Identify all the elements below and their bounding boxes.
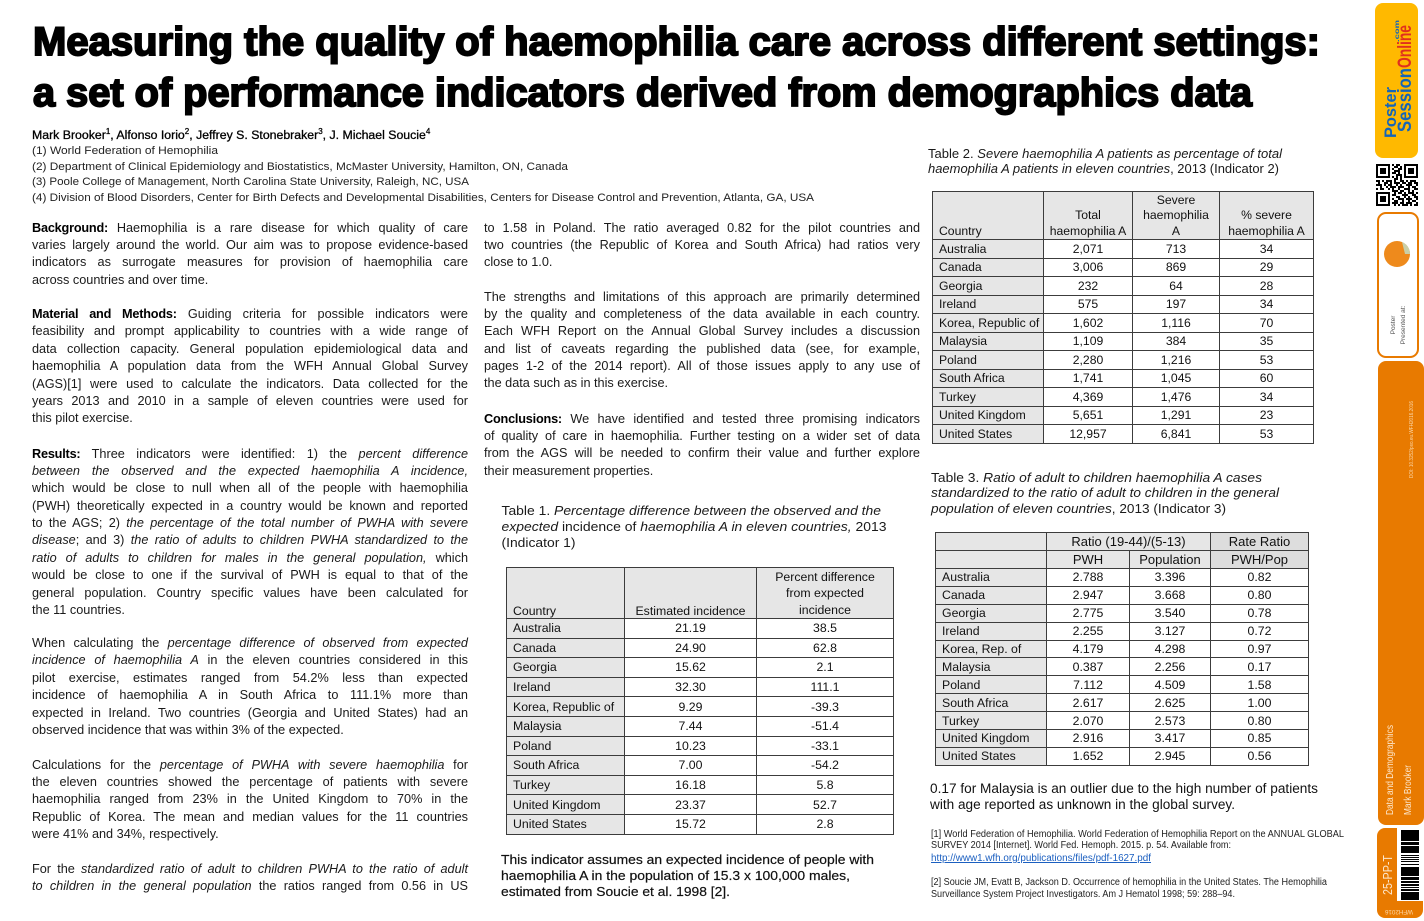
affiliations bbox=[32, 145, 814, 204]
text block: ratio continued: to 1.58 in Poland. The ratio averaged 0.82 for the pilot countries and bbox=[484, 220, 920, 234]
table 3: 0.97 bbox=[1248, 642, 1271, 656]
table 3: 2.070 bbox=[1073, 714, 1103, 728]
table 3: 3.668 bbox=[1155, 588, 1185, 602]
table 3: Turkey bbox=[942, 714, 979, 728]
table 2: Ireland bbox=[939, 297, 976, 311]
references bbox=[931, 829, 1344, 900]
text block: results bbox=[32, 446, 468, 617]
table 1: 38.5 bbox=[813, 621, 837, 635]
affiliations: (2) Department of Clinical Epidemiology and Biostatistics, McMaster University, Hamilton, ON, Canada bbox=[32, 161, 569, 173]
text block: results: (PWH) theoretically expected in a country would be known and reported bbox=[32, 499, 468, 513]
table 2: % severe bbox=[1241, 208, 1292, 222]
table 1: 21.19 bbox=[675, 621, 706, 635]
text block: ratio continued: two countries (the Republic of Korea and South Africa) had ratios very bbox=[484, 238, 920, 252]
text block: strengths and limitations: Each WFH Report on the Annual Global Survey includes a discussion bbox=[484, 324, 920, 338]
text block: results: to the AGS; 2) the percentage of the total number of PWHA with severe bbox=[32, 516, 468, 530]
table 3: Poland bbox=[942, 678, 980, 692]
panel: orange topic bar: Mark Brooker bbox=[1403, 764, 1414, 815]
table 1: Percent difference bbox=[775, 570, 875, 584]
table 3: 0.56 bbox=[1248, 749, 1271, 763]
text block: percentage severe: Calculations for the percentage of PWHA with severe haemophilia for bbox=[32, 758, 468, 772]
text block: material and methods: Material and Methods: Guiding criteria for possible indicators were bbox=[32, 307, 468, 321]
table 3: 0.80 bbox=[1248, 714, 1271, 728]
table 1: 16.18 bbox=[675, 778, 706, 792]
table 1: United Kingdom bbox=[513, 798, 600, 812]
table 1 caption: Table 1. Percentage difference between the observed and the bbox=[502, 503, 881, 518]
table 2: 6,841 bbox=[1161, 427, 1191, 441]
table 3 caption: Table 3. Ratio of adult to children haemophilia A cases bbox=[931, 470, 1262, 485]
table 2 bbox=[932, 191, 1314, 444]
table 2: 53 bbox=[1260, 427, 1273, 441]
text block: strengths and limitations: the data such as in this exercise. bbox=[484, 376, 668, 390]
table 3: Ratio (19-44)/(5-13) bbox=[1071, 534, 1186, 548]
table 3: 2.573 bbox=[1155, 714, 1185, 728]
table 3: PWH/Pop bbox=[1231, 552, 1288, 566]
table 1: from expected bbox=[786, 586, 864, 600]
panel: orange topic bar: DOI: 10.3252/pso.eu.WFH2016.2016 bbox=[1409, 401, 1415, 478]
table 3: 0.17 bbox=[1248, 660, 1271, 674]
table 2: 1,291 bbox=[1161, 408, 1191, 422]
table 3 caption: standardized to the ratio of adult to children in the general bbox=[931, 485, 1280, 500]
table 2: 70 bbox=[1260, 316, 1273, 330]
table 2: United Kingdom bbox=[939, 408, 1026, 422]
table 3: 2.775 bbox=[1073, 606, 1103, 620]
table 3: South Africa bbox=[942, 696, 1008, 710]
table 3: Population bbox=[1139, 552, 1201, 566]
text block: conclusions: of quality of care in haemophilia. Further testing on a wider set of data bbox=[484, 429, 920, 443]
text block: percentage difference: expected in Ireland. Two countries (Georgia and United States) had an bbox=[32, 706, 468, 720]
table 2: haemophilia A bbox=[1050, 224, 1126, 238]
table 1: United States bbox=[513, 817, 587, 831]
logo: PosterSessionOnline bbox=[1375, 3, 1418, 158]
table 3: Canada bbox=[942, 588, 985, 602]
references: http://www1.wfh.org/publications/files/pdf-1627.pdf bbox=[931, 853, 1151, 864]
text block: material and methods: data collection capacity. General population epidemiological data and bbox=[32, 342, 468, 356]
table 2: haemophilia A bbox=[1228, 224, 1305, 238]
table 1: -33.1 bbox=[811, 739, 839, 753]
table 2: 28 bbox=[1260, 279, 1273, 293]
table 2: 34 bbox=[1260, 390, 1273, 404]
table 3: 2.255 bbox=[1073, 624, 1103, 638]
references: [2] Soucie JM, Evatt B, Jackson D. Occurrence of hemophilia in the United States. The Hemophilia bbox=[931, 877, 1327, 888]
table 3: 4.298 bbox=[1155, 642, 1185, 656]
table 2: Total bbox=[1075, 208, 1101, 222]
table 3: Rate Ratio bbox=[1229, 534, 1290, 548]
table 2: Korea, Republic of bbox=[939, 316, 1039, 330]
table 1 caption bbox=[502, 503, 886, 550]
text block: percentage severe: Republic of Korea. The mean and median values for the 11 countries bbox=[32, 810, 468, 824]
text block: results: between the observed and the expected haemophilia A incidence, bbox=[32, 464, 468, 478]
table 2: 60 bbox=[1260, 371, 1273, 385]
text block: standardized ratio: For the standardized ratio of adult to children PWHA to the ratio of adult bbox=[32, 862, 468, 876]
panel: presented at bbox=[1378, 213, 1418, 357]
table 2: 3,006 bbox=[1073, 260, 1103, 274]
table 3: 0.72 bbox=[1248, 624, 1271, 638]
table 3: 1.00 bbox=[1248, 696, 1271, 710]
table 2: 232 bbox=[1078, 279, 1098, 293]
text block: conclusions: from the AGS will be needed to confirm their value and further explore bbox=[484, 446, 920, 460]
table 2: 384 bbox=[1166, 334, 1186, 348]
table 2: 5,651 bbox=[1073, 408, 1103, 422]
text block: percentage severe: the eleven countries showed the percentage of patients with severe bbox=[32, 775, 468, 789]
table 1 footnote: This indicator assumes an expected incidence of people with bbox=[501, 852, 874, 867]
text block: results: Results: Three indicators were identified: 1) the percent difference bbox=[32, 446, 468, 460]
table 2 caption: Table 2. Severe haemophilia A patients as percentage of total bbox=[928, 146, 1283, 161]
table 2: 35 bbox=[1260, 334, 1273, 348]
table 1: Estimated incidence bbox=[635, 604, 746, 618]
table 1 footnote: haemophilia A in the population of 15.3 x 100,000 males, bbox=[501, 868, 850, 883]
table 2: Turkey bbox=[939, 390, 976, 404]
table 1 footnote: estimated from Soucie et al. 1998 [2]. bbox=[501, 884, 730, 899]
table 2: Severe bbox=[1157, 192, 1195, 206]
table 3: Australia bbox=[942, 570, 990, 584]
table 2: 713 bbox=[1166, 242, 1186, 256]
table 2: Malaysia bbox=[939, 334, 987, 348]
table 2: 1,602 bbox=[1073, 316, 1103, 330]
sidebar bbox=[1375, 3, 1424, 918]
table 1: Ireland bbox=[513, 680, 551, 694]
text block: background: across countries and over time. bbox=[32, 273, 208, 287]
table 3 note bbox=[929, 781, 1318, 812]
table 1: 15.72 bbox=[675, 817, 706, 831]
table 1: -51.4 bbox=[811, 719, 839, 733]
table 1: 2.8 bbox=[816, 817, 834, 831]
QR code bbox=[1376, 164, 1418, 206]
table 1: 2.1 bbox=[816, 660, 834, 674]
text block: material and methods: feasibility and prompt applicability to countries with a wide range of bbox=[32, 324, 468, 338]
text block: material and methods: this pilot exercise. bbox=[32, 411, 133, 425]
text block: conclusions bbox=[484, 412, 920, 478]
table 1: 24.90 bbox=[675, 641, 706, 655]
table 3: 3.127 bbox=[1155, 624, 1185, 638]
panel: poster code and barcode bbox=[1377, 828, 1424, 918]
table 3: 0.85 bbox=[1248, 731, 1271, 745]
table 3 note: with age reported as unknown in the global survey. bbox=[929, 797, 1235, 812]
table 1: Turkey bbox=[513, 778, 550, 792]
table 2: 1,216 bbox=[1161, 353, 1191, 367]
table 2: 4,369 bbox=[1073, 390, 1103, 404]
table 3 caption: population of eleven countries , 2013 (Indicator 3) bbox=[930, 501, 1226, 516]
table 2: 1,741 bbox=[1073, 371, 1103, 385]
text block: strengths and limitations: The strengths and limitations of this approach are primarily determined bbox=[484, 290, 920, 304]
text block: results: general population. Country specific values have been calculated for bbox=[32, 586, 468, 600]
table 2: Poland bbox=[939, 353, 977, 367]
authors: Mark Brooker1, Alfonso Iorio2, Jeffrey S. Stonebraker3, J. Michael Soucie4 bbox=[32, 127, 430, 142]
text block: percentage difference: incidence of haemophilia A in the eleven countries considered in this bbox=[32, 653, 468, 667]
table 2: haemophilia bbox=[1143, 208, 1209, 222]
table 3: 0.387 bbox=[1073, 660, 1103, 674]
table 1: 111.1 bbox=[811, 680, 839, 694]
table 2: 1,109 bbox=[1073, 334, 1103, 348]
table 3: 2.625 bbox=[1155, 696, 1185, 710]
text block: percentage difference: pilot exercise, estimates ranged from 54.2% less than expected bbox=[32, 671, 468, 685]
text block: percentage difference: observed incidence that was within 3% of the expected. bbox=[32, 723, 344, 737]
text block: background: indicators as surrogate measures for provision of haemophilia care bbox=[32, 255, 468, 269]
table 1: Australia bbox=[513, 621, 561, 635]
table 1: -39.3 bbox=[811, 700, 839, 714]
text block: results: would be close to one if the survival of PWH is equal to that of the bbox=[32, 568, 468, 582]
text block: results: the 11 countries. bbox=[32, 603, 125, 617]
logo: PosterSessionOnline: Poster bbox=[1381, 87, 1400, 138]
affiliations: (3) Poole College of Management, North Carolina State University, Raleigh, NC, USA bbox=[32, 176, 469, 188]
table 2: A bbox=[1172, 224, 1180, 238]
table 1: 9.29 bbox=[679, 700, 702, 714]
table 3: 1.652 bbox=[1073, 749, 1103, 763]
table 2: Country bbox=[939, 224, 982, 238]
table 2: 64 bbox=[1169, 279, 1183, 293]
text block: percentage difference: incidence of haemophilia A in South Africa to 111.1% more than bbox=[32, 688, 468, 702]
table 3: 2.256 bbox=[1155, 660, 1185, 674]
table 3: 4.509 bbox=[1155, 678, 1185, 692]
text block: strengths and limitations: by the quality and completeness of the data available in each country. bbox=[484, 307, 920, 321]
table 1: Malaysia bbox=[513, 719, 562, 733]
table 3: 2.916 bbox=[1073, 731, 1103, 745]
table 1: Country bbox=[513, 604, 556, 618]
text block: strengths and limitations bbox=[484, 290, 920, 390]
table 2: 1,476 bbox=[1161, 390, 1191, 404]
text block: percentage severe: haemophilia ranged from 23% in the United Kingdom to 70% in the bbox=[32, 792, 468, 806]
text block: percentage difference bbox=[32, 636, 468, 737]
text block: background: Background: Haemophilia is a rare disease for which quality of care bbox=[32, 220, 468, 234]
table 2: 869 bbox=[1166, 260, 1186, 274]
table 1: 62.8 bbox=[813, 641, 837, 655]
text block: results: ratio of adults to children for males in the general population, which bbox=[32, 551, 468, 565]
text block: percentage severe: were 41% and 34%, respectively. bbox=[32, 827, 219, 841]
table 2 caption: haemophilia A patients in eleven countries, 2013 (Indicator 2) bbox=[928, 161, 1279, 176]
text block: material and methods: (AGS)[1] were used to calculate the indicators. Data collected for the bbox=[32, 377, 468, 391]
table 3: 1.58 bbox=[1248, 678, 1271, 692]
table 3: 4.179 bbox=[1073, 642, 1103, 656]
logo: PosterSessionOnline: Online bbox=[1395, 25, 1416, 68]
table 2: 2,280 bbox=[1073, 353, 1103, 367]
table 2: 1,116 bbox=[1161, 316, 1191, 330]
text block: standardized ratio bbox=[32, 862, 468, 893]
table 2: Georgia bbox=[939, 279, 982, 293]
table 3: 3.417 bbox=[1155, 731, 1185, 745]
table 1: incidence bbox=[799, 602, 851, 616]
title: Measuring the quality of haemophilia care across different settings: bbox=[33, 20, 1320, 64]
table 2: 2,071 bbox=[1073, 242, 1103, 256]
panel: poster code and barcode: WFH2016 bbox=[1384, 908, 1413, 914]
text block: results: which would be close to null when all of the people with haemophilia bbox=[32, 481, 468, 495]
table 3: 0.78 bbox=[1248, 606, 1271, 620]
table 2: 53 bbox=[1260, 353, 1273, 367]
table 3: Ireland bbox=[942, 624, 980, 638]
logo: PosterSessionOnline: .com bbox=[1394, 20, 1401, 42]
text block: conclusions: Conclusions: We have identified and tested three promising indicators bbox=[484, 412, 920, 426]
table 3: 3.540 bbox=[1155, 606, 1185, 620]
text block: ratio continued: close to 1.0. bbox=[484, 255, 552, 269]
table 1: Poland bbox=[513, 739, 551, 753]
table 3: United States bbox=[942, 749, 1016, 763]
references: SURVEY 2014 [Internet]. World Fed. Hemoph. 2015. p. 54. Available from: bbox=[931, 840, 1231, 851]
panel: orange topic bar: Data and Demographics bbox=[1385, 725, 1396, 815]
table 1: 32.30 bbox=[675, 680, 706, 694]
table 2: 1,045 bbox=[1161, 371, 1191, 385]
text block: ratio continued bbox=[484, 220, 920, 269]
text block: conclusions: their measurement properties. bbox=[484, 464, 653, 478]
text block: strengths and limitations: and list of caveats regarding the published data (see, for example, bbox=[484, 342, 920, 356]
affiliations: (1) World Federation of Hemophilia bbox=[32, 145, 219, 157]
table 1: 15.62 bbox=[675, 660, 706, 674]
table 2: 29 bbox=[1260, 260, 1273, 274]
logo: PosterSessionOnline: Session bbox=[1395, 68, 1416, 132]
text block: background bbox=[32, 220, 468, 287]
table 2: 197 bbox=[1166, 297, 1186, 311]
table 1: South Africa bbox=[513, 758, 579, 772]
table 2: 12,957 bbox=[1069, 427, 1107, 441]
text block: results: disease; and 3) the ratio of adults to children PWHA standardized to the bbox=[32, 533, 468, 547]
table 2: 34 bbox=[1260, 242, 1273, 256]
table 1 footnote bbox=[501, 852, 874, 899]
table 3: 0.82 bbox=[1248, 570, 1271, 584]
text block: material and methods bbox=[32, 307, 468, 425]
table 1: 10.23 bbox=[675, 739, 706, 753]
text block: background: varies largely around the world. Our aim was to propose evidence-based bbox=[32, 238, 468, 252]
table 3: 2.617 bbox=[1073, 696, 1103, 710]
table 2 caption bbox=[928, 146, 1283, 176]
table 2: Australia bbox=[939, 242, 986, 256]
table 3: 0.80 bbox=[1248, 588, 1271, 602]
table 1: Canada bbox=[513, 641, 556, 655]
table 1: 23.37 bbox=[675, 798, 706, 812]
text block: strengths and limitations: pages 1-2 of the 2014 report). All of those issues apply to any use of bbox=[484, 359, 920, 373]
text block: material and methods: years 2013 and 2010 in a sample of eleven countries were used for bbox=[32, 394, 468, 408]
table 1: 7.00 bbox=[679, 758, 702, 772]
affiliations: (4) Division of Blood Disorders, Center for Birth Defects and Developmental Disabilities, Centers for Disease Control and Prevention, Atlanta, GA, USA bbox=[32, 192, 814, 204]
panel: presented at: Presented at: bbox=[1400, 305, 1407, 344]
table 3 note: 0.17 for Malaysia is an outlier due to the high number of patients bbox=[930, 781, 1318, 796]
table 1: Korea, Republic of bbox=[513, 700, 614, 714]
table 3: 3.396 bbox=[1155, 570, 1185, 584]
panel: poster code and barcode: 25-PP-T bbox=[1380, 855, 1395, 895]
panel: orange topic bar bbox=[1378, 361, 1424, 825]
table 3 caption bbox=[930, 470, 1280, 516]
table 1: 7.44 bbox=[679, 719, 702, 733]
panel: presented at: Poster bbox=[1390, 315, 1397, 334]
table 3: 7.112 bbox=[1073, 678, 1103, 692]
table 2: 34 bbox=[1260, 297, 1273, 311]
text block: percentage severe bbox=[32, 758, 468, 841]
table 3: Korea, Rep. of bbox=[942, 642, 1021, 656]
text block: standardized ratio: to children in the general population the ratios ranged from 0.56 in US bbox=[32, 879, 468, 893]
table 3: 2.947 bbox=[1073, 588, 1103, 602]
title bbox=[33, 20, 1320, 116]
table 3: Malaysia bbox=[942, 660, 991, 674]
table 3 bbox=[935, 532, 1309, 766]
text block: material and methods: haemophilia A population data from the WFH Annual Global Survey bbox=[32, 359, 468, 373]
text block: percentage difference: When calculating the percentage difference of observed from expected bbox=[32, 636, 468, 650]
table 3: Georgia bbox=[942, 606, 986, 620]
table 2: United States bbox=[939, 427, 1012, 441]
table 2: 23 bbox=[1260, 408, 1273, 422]
table 3: PWH bbox=[1073, 552, 1103, 566]
table 1: 52.7 bbox=[813, 798, 837, 812]
table 1 caption: (Indicator 1) bbox=[502, 535, 576, 550]
table 3: United Kingdom bbox=[942, 731, 1030, 745]
table 3: 2.945 bbox=[1155, 749, 1185, 763]
table 2: Canada bbox=[939, 260, 982, 274]
table 1: 5.8 bbox=[816, 778, 834, 792]
table 1 bbox=[506, 567, 894, 835]
table 1: Georgia bbox=[513, 660, 557, 674]
table 3: 2.788 bbox=[1073, 570, 1103, 584]
table 1 caption: expected incidence of haemophilia A in eleven countries, 2013 bbox=[502, 519, 886, 534]
title: a set of performance indicators derived from demographics data bbox=[33, 71, 1253, 115]
table 2: 575 bbox=[1078, 297, 1098, 311]
references: Surveillance System Project Investigators. Am J Hematol 1998; 59: 288–94. bbox=[931, 889, 1235, 900]
table 2: South Africa bbox=[939, 371, 1005, 385]
table 1: -54.2 bbox=[811, 758, 839, 772]
